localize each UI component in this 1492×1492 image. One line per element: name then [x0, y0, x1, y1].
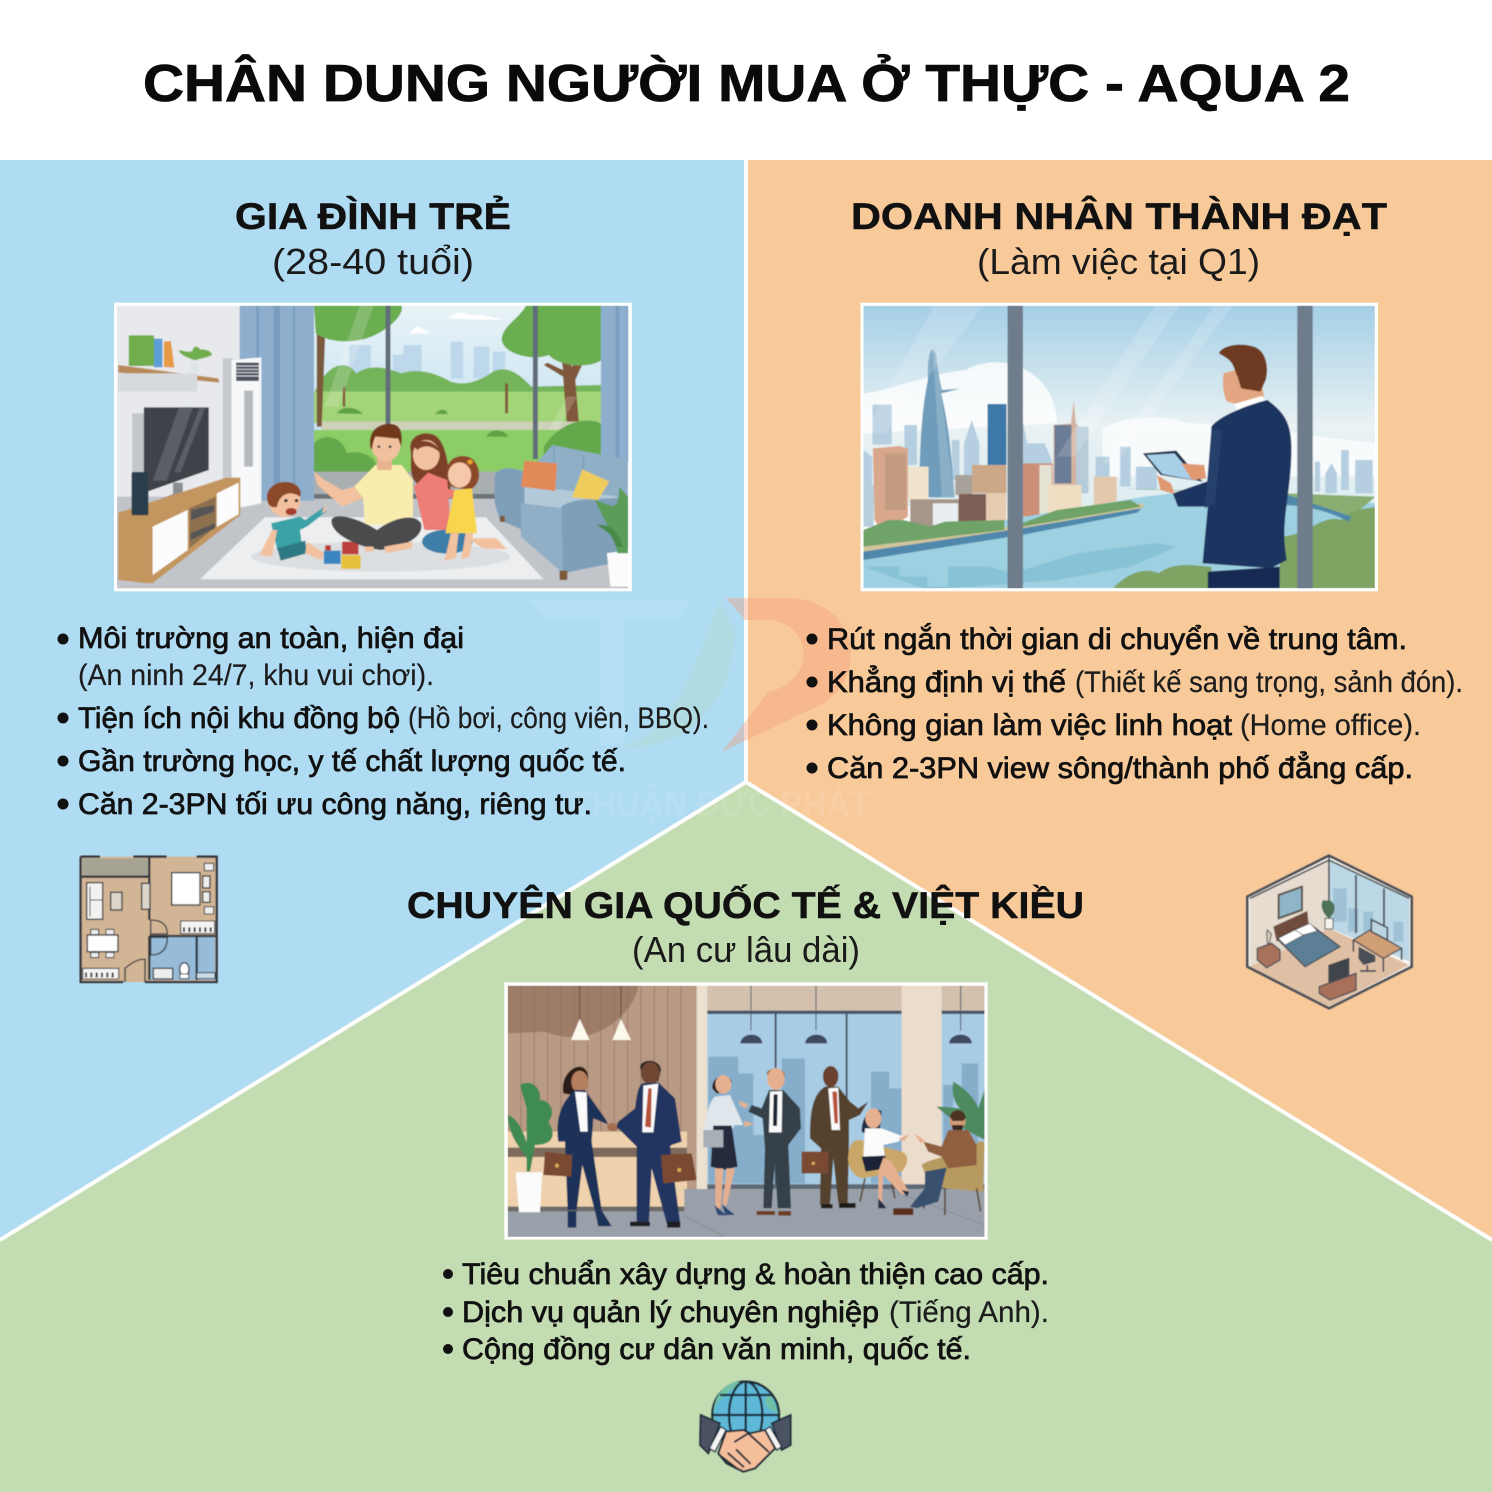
- businessman: [1143, 345, 1291, 588]
- father: [314, 424, 421, 553]
- floor: [508, 1189, 985, 1237]
- heading: young family: [235, 196, 511, 282]
- bullets: international experts: (Tiếng Anh).: [889, 1296, 1049, 1329]
- bullets: young family: [58, 622, 709, 821]
- rug: [200, 517, 544, 579]
- bullets: international experts: Tiêu chuẩn xây dựng & hoàn thiện cao cấp.: [462, 1258, 1049, 1291]
- panel: international experts background: [0, 782, 1492, 1492]
- reception desk: [508, 1131, 688, 1190]
- tv cabinet: [118, 472, 240, 583]
- heading: young family: GIA ĐÌNH TRẺ: [235, 196, 511, 237]
- bullets: entrepreneur: Rút ngắn thời gian di chuyển về trung tâm.: [827, 623, 1407, 656]
- bullets: entrepreneur: Khẳng định vị thế: [827, 665, 1066, 699]
- watermark logo: [530, 598, 870, 824]
- heading: entrepreneur: (Làm việc tại Q1): [977, 241, 1260, 282]
- bullets: young family: Tiện ích nội khu đồng bộ: [78, 702, 400, 735]
- glass glare: [863, 306, 1232, 463]
- bullets: young family: Môi trường an toàn, hiện đại: [78, 622, 464, 655]
- bullets: young family: (Hồ bơi, công viên, BBQ).: [408, 702, 709, 735]
- woman in navy suit with briefcase: [543, 1067, 612, 1228]
- potted plant: [508, 1083, 553, 1212]
- image: family in living room: [114, 303, 632, 591]
- skyline: [863, 349, 1373, 532]
- heading: international experts: [407, 884, 1084, 970]
- seated man: [893, 1110, 985, 1215]
- mullions: [1008, 306, 1023, 589]
- icon: globe with handshake: [700, 1382, 791, 1472]
- bullets: young family: (An ninh 24/7, khu vui chơi).: [78, 659, 434, 692]
- boy: [260, 482, 326, 561]
- bullets: entrepreneur: (Home office).: [1240, 709, 1421, 742]
- bullets: young family: Căn 2-3PN tối ưu công năng, riêng tư.: [78, 788, 592, 821]
- bullets: international experts: Cộng đồng cư dân văn minh, quốc tế.: [462, 1333, 971, 1366]
- seated woman: [848, 1108, 909, 1208]
- river: [863, 490, 1375, 588]
- clouds: [863, 362, 1057, 433]
- blocks: [324, 542, 361, 569]
- panel: entrepreneur background: [746, 160, 1492, 1240]
- heading: international experts: CHUYÊN GIA QUỐC TẾ & VIỆT KIỀU: [407, 884, 1084, 926]
- title: CHÂN DUNG NGƯỜI MUA Ở THỰC - AQUA 2: [143, 54, 1350, 113]
- image: businessman at window: [861, 303, 1378, 591]
- window view: [314, 306, 602, 472]
- bullets: international experts: [443, 1258, 1049, 1366]
- man in brown suit: [802, 1066, 868, 1208]
- glass wall: [707, 986, 985, 1192]
- bullets: entrepreneur: Không gian làm việc linh hoạt: [827, 709, 1233, 742]
- man in navy suit: [607, 1061, 697, 1228]
- watermark logo: THUẬN ĐỨC PHÁT: [572, 782, 870, 824]
- bullets: international experts: Dịch vụ quản lý chuyên nghiệp: [462, 1296, 879, 1329]
- heading: entrepreneur: DOANH NHÂN THÀNH ĐẠT: [851, 195, 1387, 237]
- image: international professionals in lobby: [504, 982, 988, 1240]
- television: [132, 407, 209, 507]
- curtains: [240, 306, 629, 501]
- bullets: entrepreneur: Căn 2-3PN view sông/thành phố đẳng cấp.: [827, 751, 1413, 785]
- air conditioner: [223, 357, 261, 510]
- bullets: entrepreneur: [806, 623, 1463, 785]
- palm: [937, 1082, 985, 1140]
- heading: entrepreneur: [851, 195, 1387, 282]
- girl: [444, 456, 480, 562]
- man in charcoal suit: [739, 1068, 801, 1216]
- heading: international experts: (An cư lâu dài): [632, 929, 860, 970]
- woman in white blouse: [703, 1075, 743, 1216]
- bullets: young family: Gần trường học, y tế chất lượng quốc tế.: [78, 745, 626, 778]
- mother: [410, 433, 507, 554]
- panel: young family background: [0, 160, 746, 1240]
- shelf with books and plant: [118, 335, 219, 392]
- icon: isometric room: [1247, 856, 1412, 1008]
- wood wall: [508, 986, 707, 1192]
- heading: young family: (28-40 tuổi): [272, 241, 474, 282]
- sofa: [495, 445, 630, 587]
- bullets: entrepreneur: (Thiết kế sang trọng, sảnh đón).: [1075, 666, 1463, 699]
- icon: apartment floor plan: [81, 857, 217, 982]
